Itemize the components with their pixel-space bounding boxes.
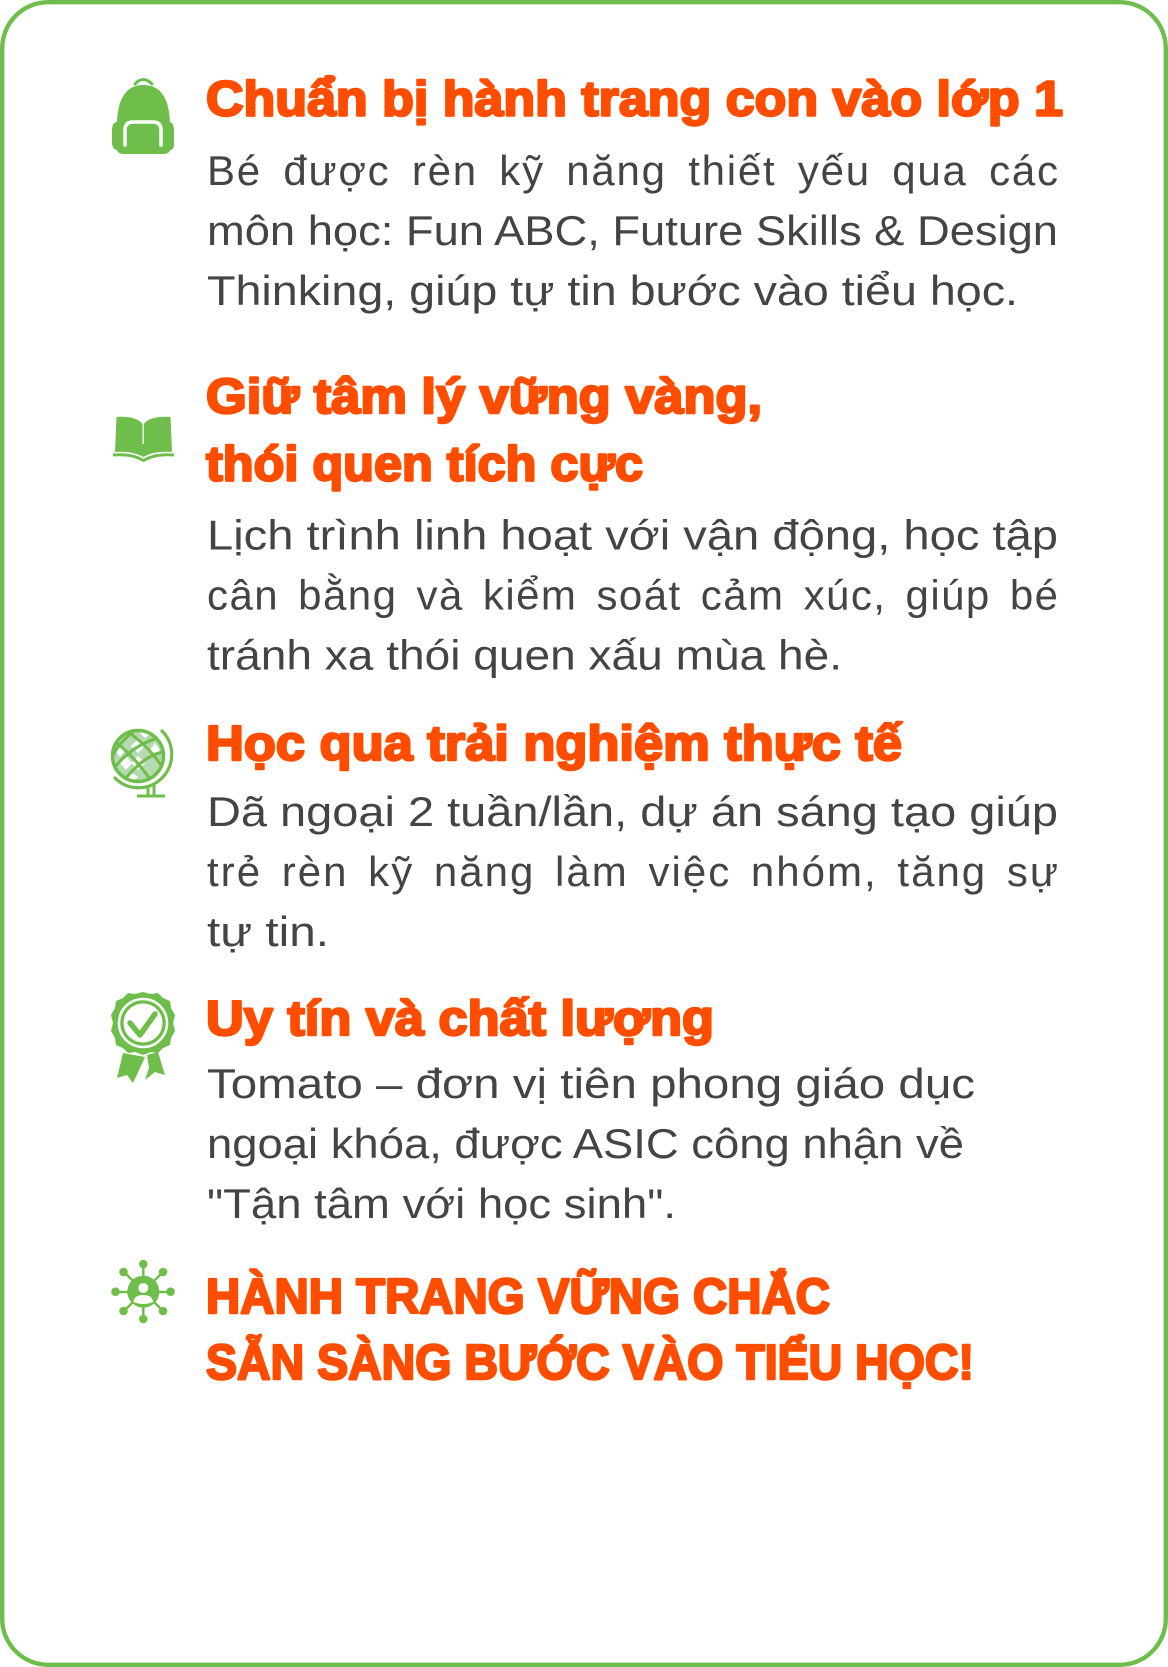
section: hands-on learning: [112, 717, 1058, 955]
section: closing message: [111, 1260, 974, 1390]
section: stable mindset: [113, 370, 1058, 678]
heading: thói quen tích cực: [206, 438, 643, 492]
closing heading: SẴN SÀNG BƯỚC VÀO TIỂU HỌC!: [206, 1335, 974, 1390]
body text: Dã ngoại 2 tuần/lần, dự án sáng tạo giúp: [207, 788, 1058, 835]
body text: ngoại khóa, được ASIC công nhận về: [207, 1120, 964, 1167]
section: reputation and quality: [111, 992, 975, 1227]
section: school preparation: [112, 72, 1063, 314]
body text: Lịch trình linh hoạt với vận động, học tập: [207, 512, 1058, 558]
body text: Bé được rèn kỹ năng thiết yếu qua các: [207, 147, 1058, 194]
body text: [207, 147, 1058, 314]
closing heading: [206, 1269, 974, 1390]
body text: tránh xa thói quen xấu mùa hè.: [207, 632, 842, 678]
body text: cân bằng và kiểm soát cảm xúc, giúp bé: [207, 572, 1058, 618]
body text: trẻ rèn kỹ năng làm việc nhóm, tăng sự: [207, 848, 1058, 895]
body text: "Tận tâm với học sinh".: [207, 1180, 676, 1227]
icon: network person: [111, 1260, 175, 1323]
closing heading: HÀNH TRANG VỮNG CHẮC: [206, 1269, 830, 1324]
heading: Uy tín và chất lượng: [206, 992, 714, 1046]
icon: backpack: [112, 80, 174, 154]
heading: Giữ tâm lý vững vàng,: [206, 370, 762, 424]
body text: tự tin.: [207, 908, 329, 955]
body text: [207, 788, 1058, 955]
heading: Học qua trải nghiệm thực tế: [206, 717, 903, 771]
body text: Thinking, giúp tự tin bước vào tiểu học.: [207, 267, 1018, 314]
heading: Chuẩn bị hành trang con vào lớp 1: [206, 72, 1063, 126]
body text: Tomato – đơn vị tiên phong giáo dục: [207, 1060, 975, 1107]
body text: [207, 512, 1058, 678]
icon: globe: [112, 728, 172, 796]
heading: [206, 370, 762, 492]
icon: award rosette: [111, 992, 175, 1083]
body text: [207, 1060, 975, 1227]
body text: môn học: Fun ABC, Future Skills & Design: [207, 207, 1058, 254]
icon: open book: [113, 417, 174, 460]
